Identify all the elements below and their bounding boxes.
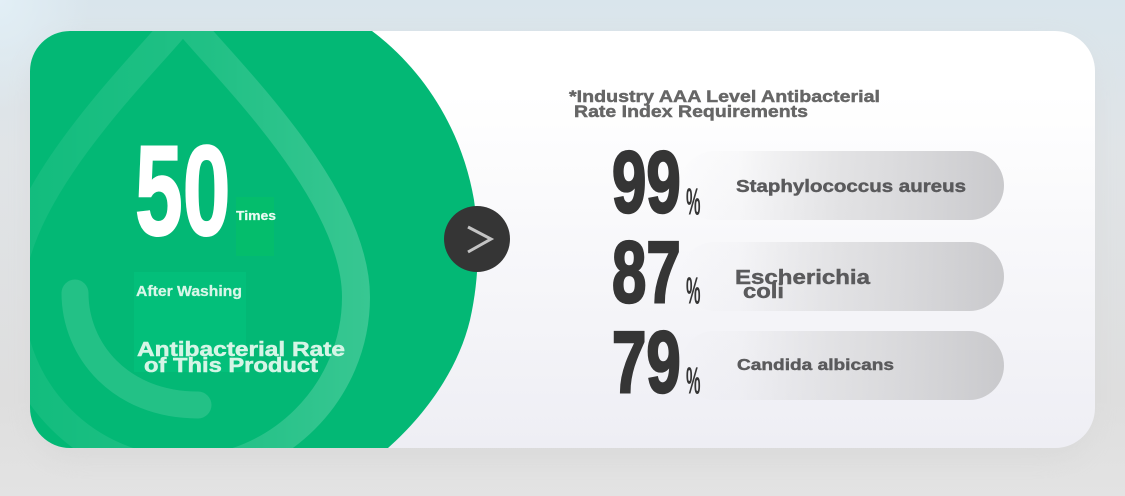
arrow button <box>444 206 510 272</box>
label: Times: Times <box>236 208 276 223</box>
label: Antibacterial Rate of This Product: Antibacterial Rate <box>137 339 345 361</box>
heading: industry requirements: *Industry AAA Level Antibacterial <box>569 87 880 106</box>
row: Escherichia coli: Escherichia <box>735 267 871 289</box>
row: Staphylococcus aureus: Staphylococcus aureus <box>736 176 966 196</box>
row: Candida albicans: Candida albicans <box>737 357 894 374</box>
label: Antibacterial Rate of This Product: of This Product <box>144 355 318 377</box>
heading: industry requirements <box>569 87 880 121</box>
row: Escherichia coli: coli <box>743 281 784 303</box>
panel: green product result <box>30 31 477 448</box>
row: Candida albicans <box>612 314 1004 410</box>
row: Candida albicans: 79 <box>612 314 681 410</box>
heading: industry requirements: Rate Index Requirements <box>574 102 808 121</box>
row: Escherichia coli: 87 <box>612 224 681 320</box>
row: Staphylococcus aureus: 99 <box>612 134 681 230</box>
row: Escherichia coli <box>612 224 1004 320</box>
row: Staphylococcus aureus <box>612 134 1004 230</box>
label: Antibacterial Rate of This Product <box>137 339 345 377</box>
label: After Washing: After Washing <box>136 284 242 300</box>
big number 50: 50 <box>135 120 230 263</box>
row: Candida albicans: % <box>686 361 701 403</box>
row: Staphylococcus aureus: % <box>686 182 701 224</box>
row: Escherichia coli: % <box>686 271 701 313</box>
icon: water drop watermark <box>10 17 356 470</box>
